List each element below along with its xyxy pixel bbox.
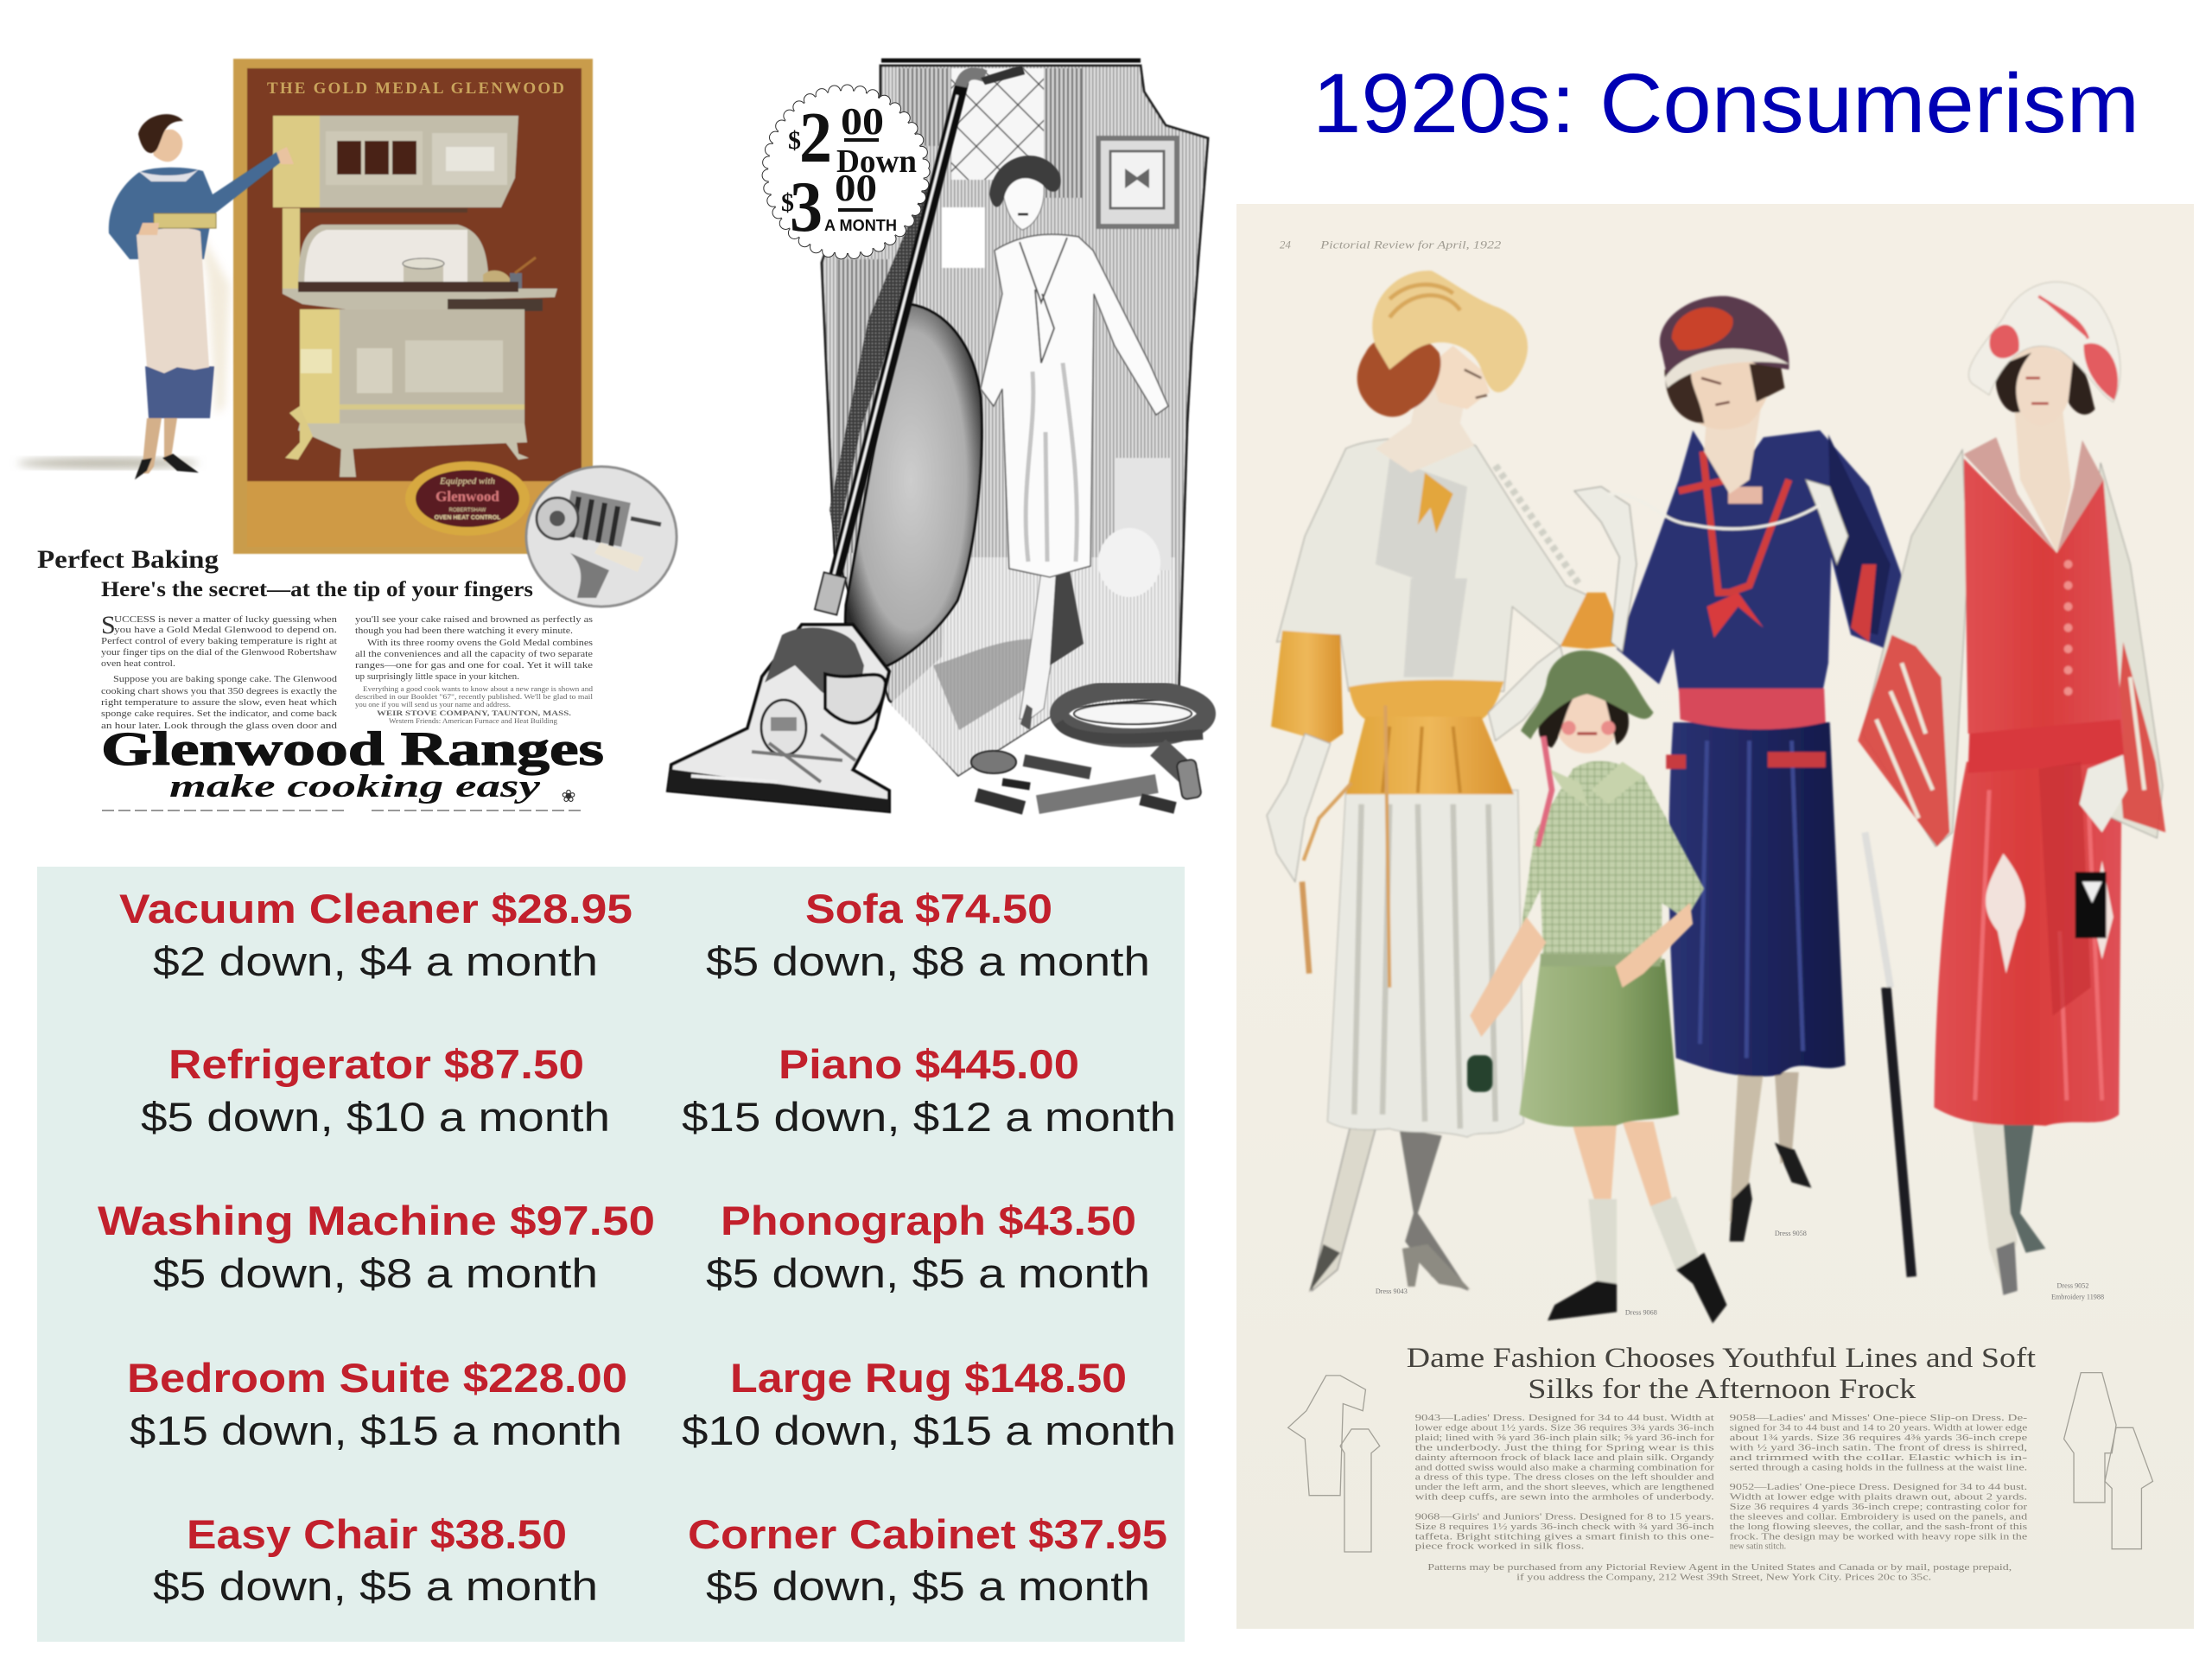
white ornament: [1986, 854, 2025, 974]
poster heading: THE GOLD MEDAL GLENWOOD: [267, 79, 564, 98]
hat: [1968, 282, 2120, 402]
article body: left column: under the left arm, and the short sleeves, which are lengthened: [1415, 1483, 1714, 1492]
panel: vacuum cleaner advertisement: [668, 60, 1208, 814]
magazine page header: Pictorial Review for April, 1922: [1319, 238, 1502, 251]
pattern sketches: right: [2064, 1373, 2153, 1549]
neck and head: [2014, 409, 2071, 553]
ad body copy: WEIR STOVE COMPANY, TAUNTON, MASS.: [377, 709, 571, 717]
article body: right column: 9052—Ladies' One-piece Dress. Designed for 34 to 44 bust.: [1730, 1483, 2027, 1492]
price: corner cabinet: Corner Cabinet $37.95: [688, 1511, 1167, 1557]
article body: right column: [1730, 1414, 2028, 1552]
dress number captions: Dress 9052: [2056, 1282, 2088, 1290]
hat: [1660, 296, 1789, 378]
price: corner cabinet: [688, 1511, 1167, 1609]
panel: fashion magazine page: [1236, 204, 2194, 1629]
skirt: [1327, 790, 1523, 1137]
title: 1920s: Consumerism: [1313, 56, 2139, 150]
panel: installment price list: [37, 867, 1185, 1642]
price badge: 2: [799, 98, 832, 178]
ad body copy: oven heat control.: [101, 658, 175, 669]
article body: left column: dainty afternoon frock of black lace and plain silk. Organdy: [1415, 1453, 1715, 1463]
ad body copy: Suppose you are baking sponge cake. The Glenwood: [113, 674, 338, 684]
neck and head: [1376, 381, 1474, 473]
lower range body: [300, 309, 340, 423]
sailor tie: [1707, 593, 1764, 638]
price: sofa: [706, 886, 1150, 984]
waistband: [1679, 689, 1826, 729]
buttons: [2064, 560, 2072, 696]
ad body copy: With its three roomy ovens the Gold Medal combines: [367, 638, 593, 648]
pot: [404, 264, 443, 290]
ribbon: [1418, 473, 1453, 533]
article body: right column: Size 36 requires 4 yards 36-inch crepe; contrasting color for: [1730, 1503, 2028, 1512]
ad body copy: you one if you will send us your name and address.: [355, 701, 511, 709]
article footer note: if you address the Company, 212 West 39th Street, New York City. Prices 20c to 35c.: [1516, 1573, 1931, 1583]
ad body copy: cooking chart shows you that 350 degrees is exactly the: [101, 686, 337, 696]
price: easy chair: Easy Chair $38.50: [187, 1511, 567, 1557]
price: bedroom suite: Bedroom Suite $228.00: [127, 1355, 627, 1401]
wainscot and floor: [838, 259, 890, 553]
price: sofa: $5 down, $8 a month: [706, 938, 1150, 984]
legs and shoes: [1973, 1122, 2018, 1291]
illustration: vacuum cleaner head: [668, 625, 889, 811]
illustration: stove in framed poster: ROBERTSHAW: [449, 508, 486, 513]
price: easy chair: [153, 1511, 598, 1609]
article headline: Dame Fashion Chooses Youthful Lines and Soft: [1407, 1343, 2036, 1374]
bodice: [1521, 761, 1704, 963]
ad body copy: Western Friends: American Furnace and Heat Building: [389, 717, 557, 725]
magazine page header: 24: [1280, 238, 1291, 251]
price: easy chair: $5 down, $5 a month: [153, 1563, 598, 1609]
ad body copy: sponge cake requires. Set the indicator, and come back: [101, 709, 338, 719]
subheadline: Here's the secret—at the tip of your fingers: [101, 578, 533, 601]
illustration: vacuum handle: [815, 65, 1025, 614]
pockets: [1666, 754, 1686, 769]
price: large rug: [682, 1355, 1176, 1453]
legs and shoes: [1312, 1122, 1376, 1291]
ad body copy: an hour later. Look through the glass oven door and: [101, 721, 338, 731]
illustration: woman baking: [17, 114, 294, 480]
price badge: Down: [836, 143, 917, 180]
article body: right column: new satin stitch.: [1730, 1542, 1786, 1552]
price badge: 3: [790, 167, 823, 247]
badge: [405, 461, 530, 536]
sleeve cuffs: [1271, 631, 1343, 743]
hat: [1521, 651, 1654, 740]
magazine paper: [1236, 204, 2194, 1629]
neck and head: [1704, 409, 1761, 493]
gloved hand on child: [1488, 646, 1566, 741]
ad body copy: up surprisingly little space in your kitchen.: [355, 671, 519, 682]
illustration: stove in framed poster: [233, 59, 593, 554]
price: washing machine: [98, 1198, 655, 1296]
sash: [1968, 720, 2125, 773]
price badge: 00: [841, 100, 884, 143]
skirt: [1934, 762, 2122, 1126]
figure: woman in white and orange dress: [1267, 270, 1623, 1293]
ad body copy: your finger tips on the dial of the Glenwood Robertshaw: [101, 647, 337, 658]
range legs: [285, 406, 313, 460]
price: phonograph: [706, 1198, 1150, 1296]
price: vacuum cleaner: Vacuum Cleaner $28.95: [119, 886, 632, 931]
dress number captions: [1376, 1230, 2104, 1317]
price: large rug: $10 down, $15 a month: [682, 1408, 1176, 1453]
kettle: [483, 270, 512, 291]
price: bedroom suite: $15 down, $15 a month: [130, 1408, 622, 1453]
article body: left column: a dress of this type. The dress closes on the left shoulder and: [1415, 1473, 1714, 1483]
illustration: stove in framed poster: OVEN HEAT CONTROL: [435, 515, 501, 521]
bodice: [1277, 438, 1597, 691]
price: piano: Piano $445.00: [779, 1041, 1079, 1087]
ad body copy: ranges—one for gas and one for coal. Yet it will take: [355, 660, 593, 671]
skirt: [1669, 722, 1846, 1077]
article body: right column: and trimmed with the collar. Elastic which is in-: [1730, 1453, 2027, 1463]
dress number captions: Dress 9058: [1775, 1230, 1807, 1237]
price: vacuum cleaner: $2 down, $4 a month: [153, 938, 598, 984]
ad body copy: Everything a good cook wants to know about a new range is shown and: [363, 685, 593, 693]
price: washing machine: $5 down, $8 a month: [153, 1250, 598, 1296]
article body: left column: [1415, 1414, 1715, 1552]
dress number captions: Embroidery 11988: [2051, 1294, 2104, 1301]
price: refrigerator: [141, 1041, 610, 1140]
ad body copy: you have a Gold Medal Glenwood to depend on.: [114, 625, 337, 635]
dress number captions: Dress 9068: [1625, 1309, 1657, 1317]
article body: left column: taffeta. Bright stitching gives a smart finish to this one-: [1415, 1532, 1714, 1541]
ad body copy: though you had been there watching it every minute.: [355, 626, 573, 636]
article footer note: Patterns may be purchased from any Pictorial Review Agent in the United States and Canada or by mail, postage prepaid,: [1427, 1563, 2012, 1573]
illustration: stove in framed poster: Glenwood: [435, 488, 499, 505]
dress front: [1964, 459, 2123, 734]
price: phonograph: Phonograph $43.50: [721, 1198, 1136, 1243]
arms and purse: [1470, 917, 1546, 1037]
price badge: A MONTH: [824, 217, 897, 234]
article body: right column: signed for 34 to 44 bust and 14 to 20 years. Width at lower edge: [1730, 1424, 2028, 1433]
illustration: woman in white dress: [981, 156, 1168, 730]
head: [1554, 685, 1619, 753]
window: [951, 68, 1044, 180]
article body: left column: with deep cuffs, are sewn into the armholes of underbody.: [1415, 1493, 1714, 1503]
article body: left column: piece frock worked in silk floss.: [1415, 1542, 1585, 1552]
article headline: [1407, 1343, 2036, 1405]
price badge: $: [788, 126, 801, 155]
legs and shoes: [1730, 1072, 1764, 1235]
hat: [1372, 270, 1528, 392]
article body: left column: 9068—Girls' and Juniors' Dress. Designed for 8 to 15 years.: [1415, 1512, 1714, 1522]
price: refrigerator: Refrigerator $87.50: [168, 1041, 584, 1087]
price: piano: $15 down, $12 a month: [682, 1094, 1176, 1140]
umbrella: [1865, 832, 1891, 988]
article body: right column: with ½ yard 36-inch satin. The front of dress is shirred,: [1730, 1443, 2027, 1452]
article body: right column: frock. The design may be worked with heavy rope silk in the: [1730, 1532, 2028, 1541]
article footer note: [1427, 1563, 2012, 1583]
illustration: vacuum bag: [830, 183, 982, 671]
price badge: 00: [835, 167, 877, 209]
slogan: make cooking easy: [169, 769, 541, 804]
warming closet: [273, 116, 518, 207]
orange sash and panel: [1349, 680, 1503, 720]
panel background: [37, 867, 1185, 1642]
article body: right column: about 1¾ yards. Size 36 requires 4⅜ yards 36-inch crepe: [1730, 1433, 2028, 1443]
article body: left column: 9043—Ladies' Dress. Designed for 34 to 44 bust. Width at: [1415, 1414, 1714, 1423]
price: sofa: Sofa $74.50: [805, 886, 1052, 931]
article body: left column: plaid; lined with ⅝ yard 36-inch plain silk; ⅝ yard 36-inch for: [1415, 1433, 1715, 1443]
price badge: [768, 91, 924, 253]
shoes: [1548, 1281, 1617, 1320]
ad body copy: UCCESS is never a matter of lucky guessing when: [114, 614, 338, 625]
article body: left column: and dotted swiss would also make a charming combination for: [1415, 1463, 1715, 1472]
illustration: stove in framed poster: Equipped with: [439, 476, 495, 486]
price: bedroom suite: [127, 1355, 627, 1453]
price: phonograph: $5 down, $5 a month: [706, 1250, 1150, 1296]
article body: left column: the underbody. Just the thing for Spring wear is this: [1415, 1443, 1714, 1452]
ad body copy: described in our Booklet "67", recently published. We'll be glad to mail: [355, 693, 594, 701]
gloved hand and pearl strand: [1574, 486, 1637, 652]
sleeves: [1862, 450, 1968, 847]
price: large rug: Large Rug $148.50: [730, 1355, 1127, 1401]
hair: [1357, 334, 1440, 416]
ad body copy: S: [101, 611, 116, 639]
figure: girl in green dress: [1467, 651, 1726, 1323]
ad body copy: [101, 611, 594, 731]
price: refrigerator: $5 down, $10 a month: [141, 1094, 610, 1140]
figure: woman with umbrella in navy dress: [1574, 296, 1911, 1277]
cooktop: [283, 289, 557, 309]
price: washing machine: Washing Machine $97.50: [98, 1198, 655, 1243]
article body: right column: the sleeves and collar. Embroidery is used on the panels, and: [1730, 1512, 2027, 1522]
gloved arm and cord: [1267, 734, 1331, 881]
illustration: interior scene: [822, 60, 1208, 775]
price: vacuum cleaner: [119, 886, 632, 984]
skirt: [1519, 959, 1679, 1127]
gloved hand: [2080, 754, 2127, 832]
pattern sketches: left: [1288, 1376, 1380, 1552]
figure: woman in red dress: [1858, 282, 2165, 1295]
article body: left column: lower edge about 1½ yards. Size 36 requires 3¾ yards 36-inch: [1415, 1424, 1714, 1433]
icon: small flower mark: ❀: [562, 787, 575, 806]
price: corner cabinet: $5 down, $5 a month: [706, 1563, 1150, 1609]
article body: right column: Width at lower edge with plaits drawn out, about 2 yards.: [1730, 1493, 2027, 1503]
picture frame: [1098, 138, 1177, 226]
magazine page header: [1280, 238, 1502, 251]
headline: Perfect Baking: [37, 545, 219, 574]
ad body copy: right temperature to assure the slow, even heat which: [101, 697, 338, 708]
article body: left column: Size 8 requires 1½ yards 36-inch check with ¾ yard 36-inch: [1415, 1522, 1714, 1532]
panel: Glenwood stove advertisement: [17, 59, 677, 810]
article headline: Silks for the Afternoon Frock: [1528, 1374, 1916, 1405]
price badge: $: [781, 188, 794, 217]
legs and socks: [1572, 1122, 1617, 1199]
backsplash and supports: [283, 208, 300, 290]
dress number captions: Dress 9043: [1376, 1287, 1408, 1295]
ad body copy: all the conveniences and all the capacity of two separate: [355, 649, 593, 659]
price: piano: [682, 1041, 1176, 1140]
footer rule: [102, 810, 581, 811]
ad body copy: you'll see your cake raised and browned as perfectly as: [355, 614, 593, 625]
article body: right column: serted through a casing holds in the fullness at the waist line.: [1730, 1463, 2027, 1472]
bodice and sleeves: [1617, 430, 1906, 691]
article body: right column: the long flowing sleeves, the collar, and the sash-front of this: [1730, 1522, 2027, 1532]
ad body copy: Perfect control of every baking temperature is right at: [101, 636, 337, 646]
illustration: hose and attachments: [971, 690, 1206, 814]
black swatch: [2075, 872, 2107, 938]
ribbon: [1538, 736, 1552, 847]
icon: oven control dial inset: [526, 467, 677, 607]
brand name: Glenwood Ranges: [101, 722, 604, 775]
article body: right column: 9058—Ladies' and Misses' One-piece Slip-on Dress. De-: [1730, 1414, 2027, 1423]
